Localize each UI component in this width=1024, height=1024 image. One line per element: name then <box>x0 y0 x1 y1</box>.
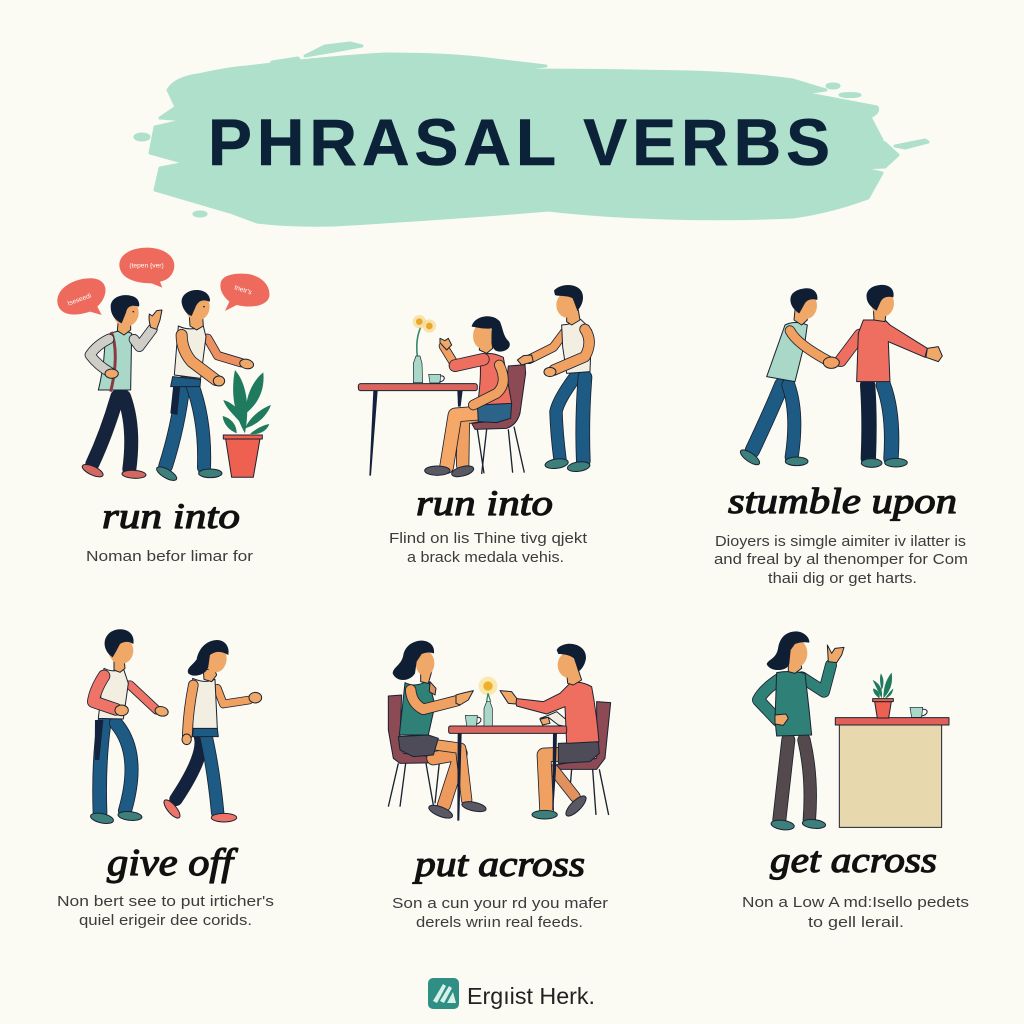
person: man in tank top <box>155 290 254 483</box>
description: Flind on lis Thine tivg qjekt <box>389 530 588 547</box>
illustration: man and woman walking <box>90 629 262 825</box>
verb label: run into <box>416 483 553 523</box>
panel: stumble upon <box>714 285 968 587</box>
verb label: get across <box>770 840 937 880</box>
description: Non a Low A md:Isello pedets <box>742 894 969 911</box>
chair <box>472 365 526 474</box>
panel: run into at table <box>358 285 592 566</box>
brush stroke background <box>135 43 928 225</box>
description <box>742 894 969 931</box>
title banner <box>135 43 928 225</box>
panel: run into with plant <box>57 248 271 565</box>
verb label: give off <box>107 842 238 884</box>
person: standing man <box>517 285 592 473</box>
brand name: Ergıist Herk. <box>467 983 595 1009</box>
speech bubble right: tnetr's <box>233 284 253 297</box>
person: man in coral sleeves <box>90 629 169 825</box>
description <box>57 893 274 929</box>
description: thaii dig or get harts. <box>768 570 917 587</box>
person: woman walking <box>161 640 262 822</box>
description <box>389 530 588 566</box>
illustration: woman standing beside a counter <box>758 631 949 831</box>
heading: PHRASAL VERBS <box>208 105 835 179</box>
description <box>392 895 608 931</box>
description: Non bert see to put irticher's <box>57 893 274 910</box>
cup <box>429 374 444 383</box>
illustration: two men walking and talking beside a plant <box>57 248 271 483</box>
person: woman in teal sweater <box>758 631 844 831</box>
description <box>714 533 968 587</box>
icon: logo mark <box>428 978 459 1009</box>
verb label: stumble upon <box>728 481 957 521</box>
table <box>358 384 477 476</box>
table <box>449 726 567 821</box>
speech bubble top <box>119 248 174 288</box>
verb label: run into <box>102 496 240 536</box>
icon: potted plant <box>223 370 271 477</box>
logo <box>428 978 595 1009</box>
right chair <box>555 702 611 815</box>
description: quiel erigeir dee corids. <box>79 912 252 929</box>
description: to gell lerail. <box>808 914 904 931</box>
illustration: woman seated at table and man standing behind <box>358 285 592 479</box>
cup <box>910 707 927 717</box>
description: Son a cun your rd you mafer <box>392 895 608 912</box>
vase with flower <box>479 677 497 726</box>
speech bubble top: (tepen {ver) <box>129 262 164 269</box>
panel: put across <box>388 641 611 931</box>
verb label: put across <box>412 844 585 884</box>
person: seated woman <box>425 316 512 479</box>
speech bubble left <box>57 278 106 315</box>
description: a brack medala vehis. <box>407 549 564 566</box>
person: man in coral sweater <box>823 285 942 467</box>
person: man in mint tank <box>738 288 828 467</box>
speech bubble right <box>220 274 269 311</box>
counter <box>835 718 949 827</box>
panel: get across <box>742 631 969 931</box>
person: woman in teal top <box>393 641 487 821</box>
speech bubble left: Iseseedi <box>67 292 93 308</box>
panel: give off <box>57 629 274 929</box>
icon: small potted plant <box>873 673 893 718</box>
left chair <box>388 695 445 807</box>
illustration: woman and man talking across a table <box>388 641 611 821</box>
person: man with suspenders <box>81 295 162 479</box>
description: and freal by al thenomper for Com <box>714 551 968 568</box>
description: derels wriın real feeds. <box>416 914 583 931</box>
person: man in coral sweater <box>500 644 599 819</box>
cup <box>465 715 481 726</box>
description: Dioyers is simgle aimiter iv ilatter is <box>715 533 966 550</box>
illustration: two people bumping and shaking hands <box>738 285 942 467</box>
description: Noman befor limar for <box>86 548 253 565</box>
vase with flowers <box>413 315 436 383</box>
